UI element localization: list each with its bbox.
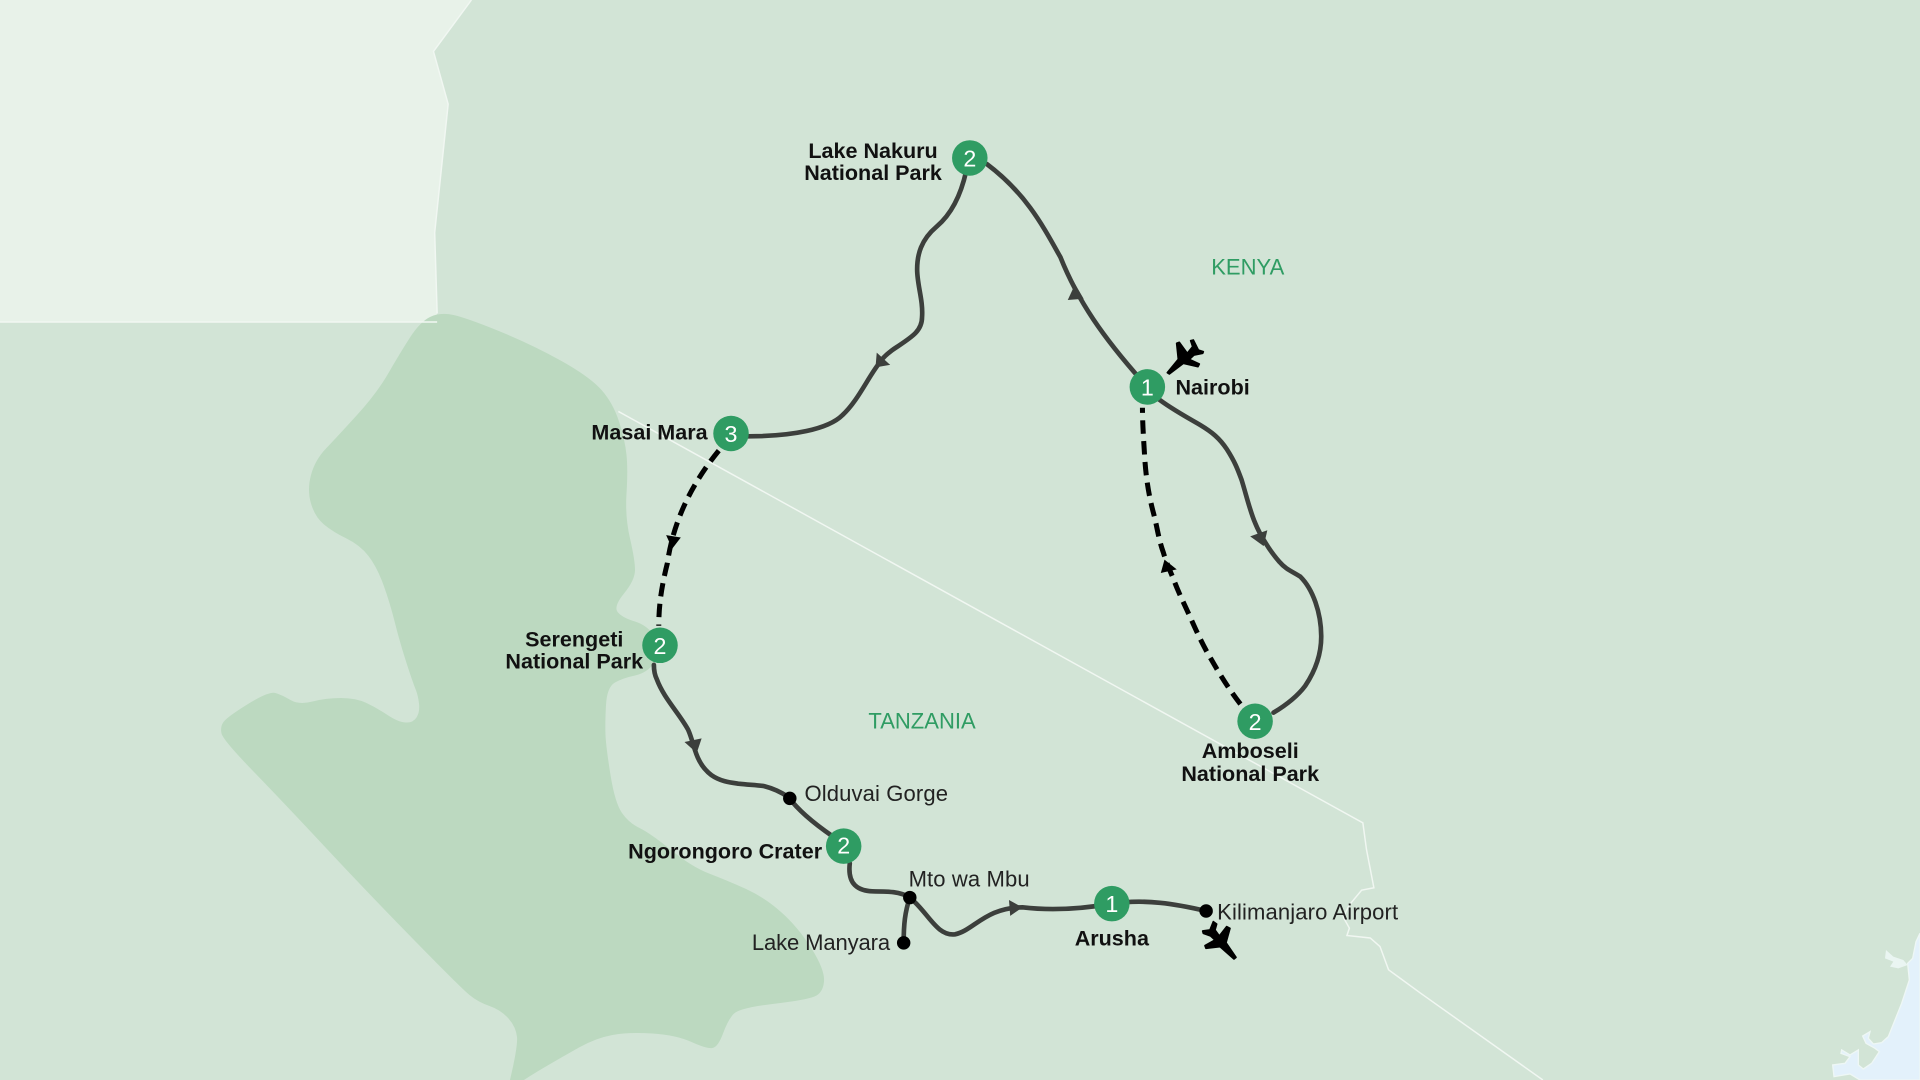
label: Ngorongoro Crater: Ngorongoro Crater <box>628 838 823 863</box>
stop: Serengeti: 2 <box>654 633 666 659</box>
route: Masai Mara to Serengeti, dashed <box>659 451 719 626</box>
route: Nairobi to Amboseli <box>1157 398 1321 713</box>
icon: plane at Kilimanjaro <box>1203 922 1236 959</box>
stop: Arusha: 1 <box>1105 891 1118 917</box>
label: Olduvai Gorge: Olduvai Gorge <box>804 781 948 806</box>
route: Lake Nakuru to Masai Mara <box>731 171 966 436</box>
label: Mto wa Mbu: Mto wa Mbu <box>909 867 1030 892</box>
label: Serengeti National Park: National Park <box>505 649 643 674</box>
route: Serengeti to Ngorongoro <box>654 665 833 836</box>
route: Mto wa Mbu to Lake Manyara <box>904 898 910 943</box>
stop: Masai Mara: 3 <box>725 421 737 447</box>
stop: Masai Mara <box>713 416 749 451</box>
label: Nairobi: Nairobi <box>1176 374 1250 399</box>
stop: Ngorongoro <box>826 828 861 864</box>
label: Lake Nakuru National Park: National Park <box>804 160 942 185</box>
neighbouring country: light region <box>0 0 471 322</box>
country label: Tanzania: TANZANIA <box>868 709 976 734</box>
park: green conservation area <box>221 314 824 1080</box>
label: Serengeti National Park: Serengeti <box>525 627 623 652</box>
stop: Arusha <box>1094 886 1130 921</box>
route: Nairobi to Lake Nakuru <box>987 164 1147 387</box>
stop: Nairobi: 1 <box>1141 375 1154 401</box>
stop: Serengeti <box>642 628 678 663</box>
label: Amboseli National Park: National Park <box>1181 761 1319 786</box>
route: Ngorongoro to Kilimanjaro <box>849 863 1206 934</box>
label: Amboseli National Park: Amboseli <box>1202 738 1299 763</box>
label: Arusha: Arusha <box>1075 925 1150 950</box>
label: Kilimanjaro Airport: Kilimanjaro Airport <box>1217 900 1398 925</box>
stop: Ngorongoro: 2 <box>837 832 850 858</box>
label: Lake Nakuru National Park: Lake Nakuru <box>808 138 938 163</box>
stop: Lake Nakuru: 2 <box>963 146 976 172</box>
stop: Lake Nakuru <box>952 140 988 176</box>
stop: Amboseli: 2 <box>1249 709 1262 735</box>
icon: plane at Nairobi <box>1167 340 1203 374</box>
route: Amboseli to Nairobi, dashed <box>1142 408 1240 704</box>
country label: Kenya: KENYA <box>1211 254 1285 279</box>
stop: Amboseli <box>1237 703 1273 739</box>
ocean <box>1833 933 1920 1080</box>
label: Masai Mara: Masai Mara <box>591 420 709 445</box>
stop: Nairobi <box>1130 369 1165 405</box>
waypoints <box>783 792 1213 950</box>
label: Lake Manyara: Lake Manyara <box>752 930 891 955</box>
